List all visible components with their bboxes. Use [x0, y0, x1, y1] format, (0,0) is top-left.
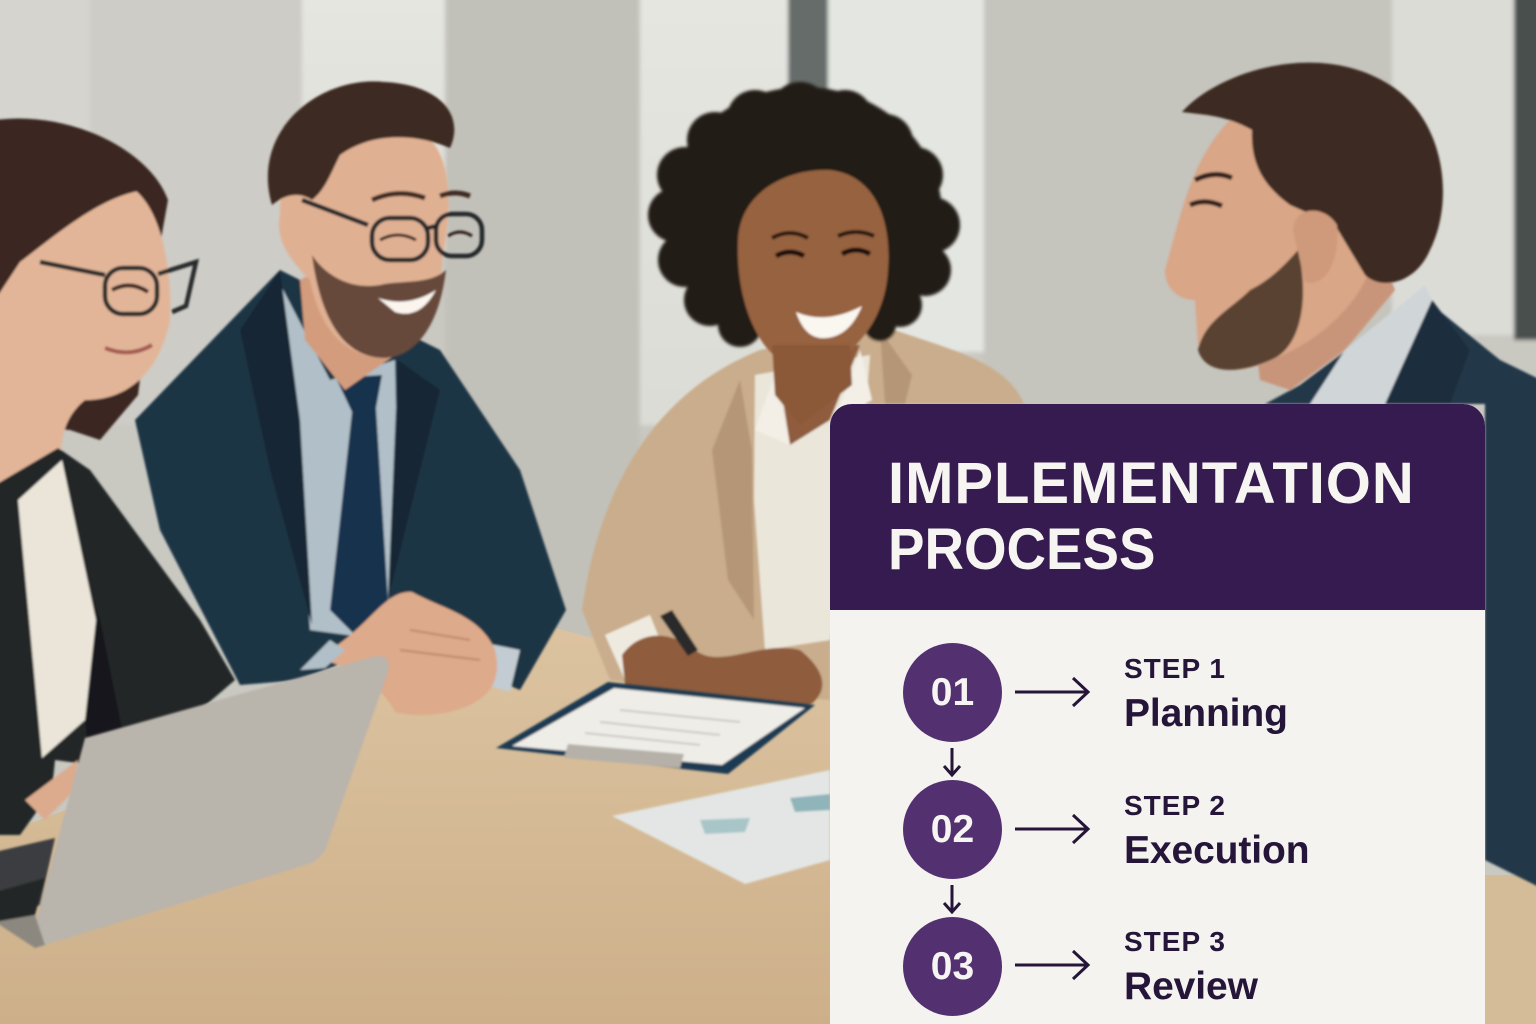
panel: implementation process card — [830, 404, 1485, 1024]
afro hair — [648, 82, 960, 347]
person: man with glasses and navy tie — [135, 81, 566, 715]
step 3 label: Review — [1124, 965, 1258, 1008]
panel header — [830, 404, 1485, 610]
title: IMPLEMENTATION — [888, 451, 1415, 516]
step 2 label — [1124, 790, 1309, 872]
step 1 label: STEP 1 — [1124, 653, 1226, 684]
arrow: step 2 to step 3 — [944, 885, 960, 912]
step 3 label: STEP 3 — [1124, 926, 1226, 957]
step 3 number badge — [903, 917, 1002, 1016]
step 2 label: STEP 2 — [1124, 790, 1226, 821]
laptop — [0, 656, 389, 948]
title — [888, 451, 1415, 582]
step 2 number badge — [903, 780, 1002, 879]
paper on the table — [612, 770, 830, 884]
table — [0, 628, 1536, 1024]
person: woman in beige blazer with afro — [582, 82, 1024, 719]
step 1 label: Planning — [1124, 692, 1288, 735]
person: woman with glasses, left — [0, 118, 235, 835]
arrow: step 3 to label — [1015, 951, 1088, 979]
step 1 number badge — [903, 643, 1002, 742]
step 3 number badge: 03 — [931, 945, 974, 988]
title: PROCESS — [888, 517, 1155, 582]
arrow: step 1 to step 2 — [944, 748, 960, 775]
step 2 label: Execution — [1124, 829, 1309, 872]
clipboard with papers — [496, 682, 815, 774]
person: man in profile, right — [1165, 63, 1536, 888]
arrow: step 1 to label — [1015, 678, 1088, 706]
step 1 number badge: 01 — [931, 671, 974, 714]
arrows — [943, 676, 1090, 980]
step 2 number badge: 02 — [931, 808, 974, 851]
step 3 label — [1124, 926, 1258, 1008]
arrow: step 2 to label — [1015, 815, 1088, 843]
step 1 label — [1124, 653, 1288, 735]
